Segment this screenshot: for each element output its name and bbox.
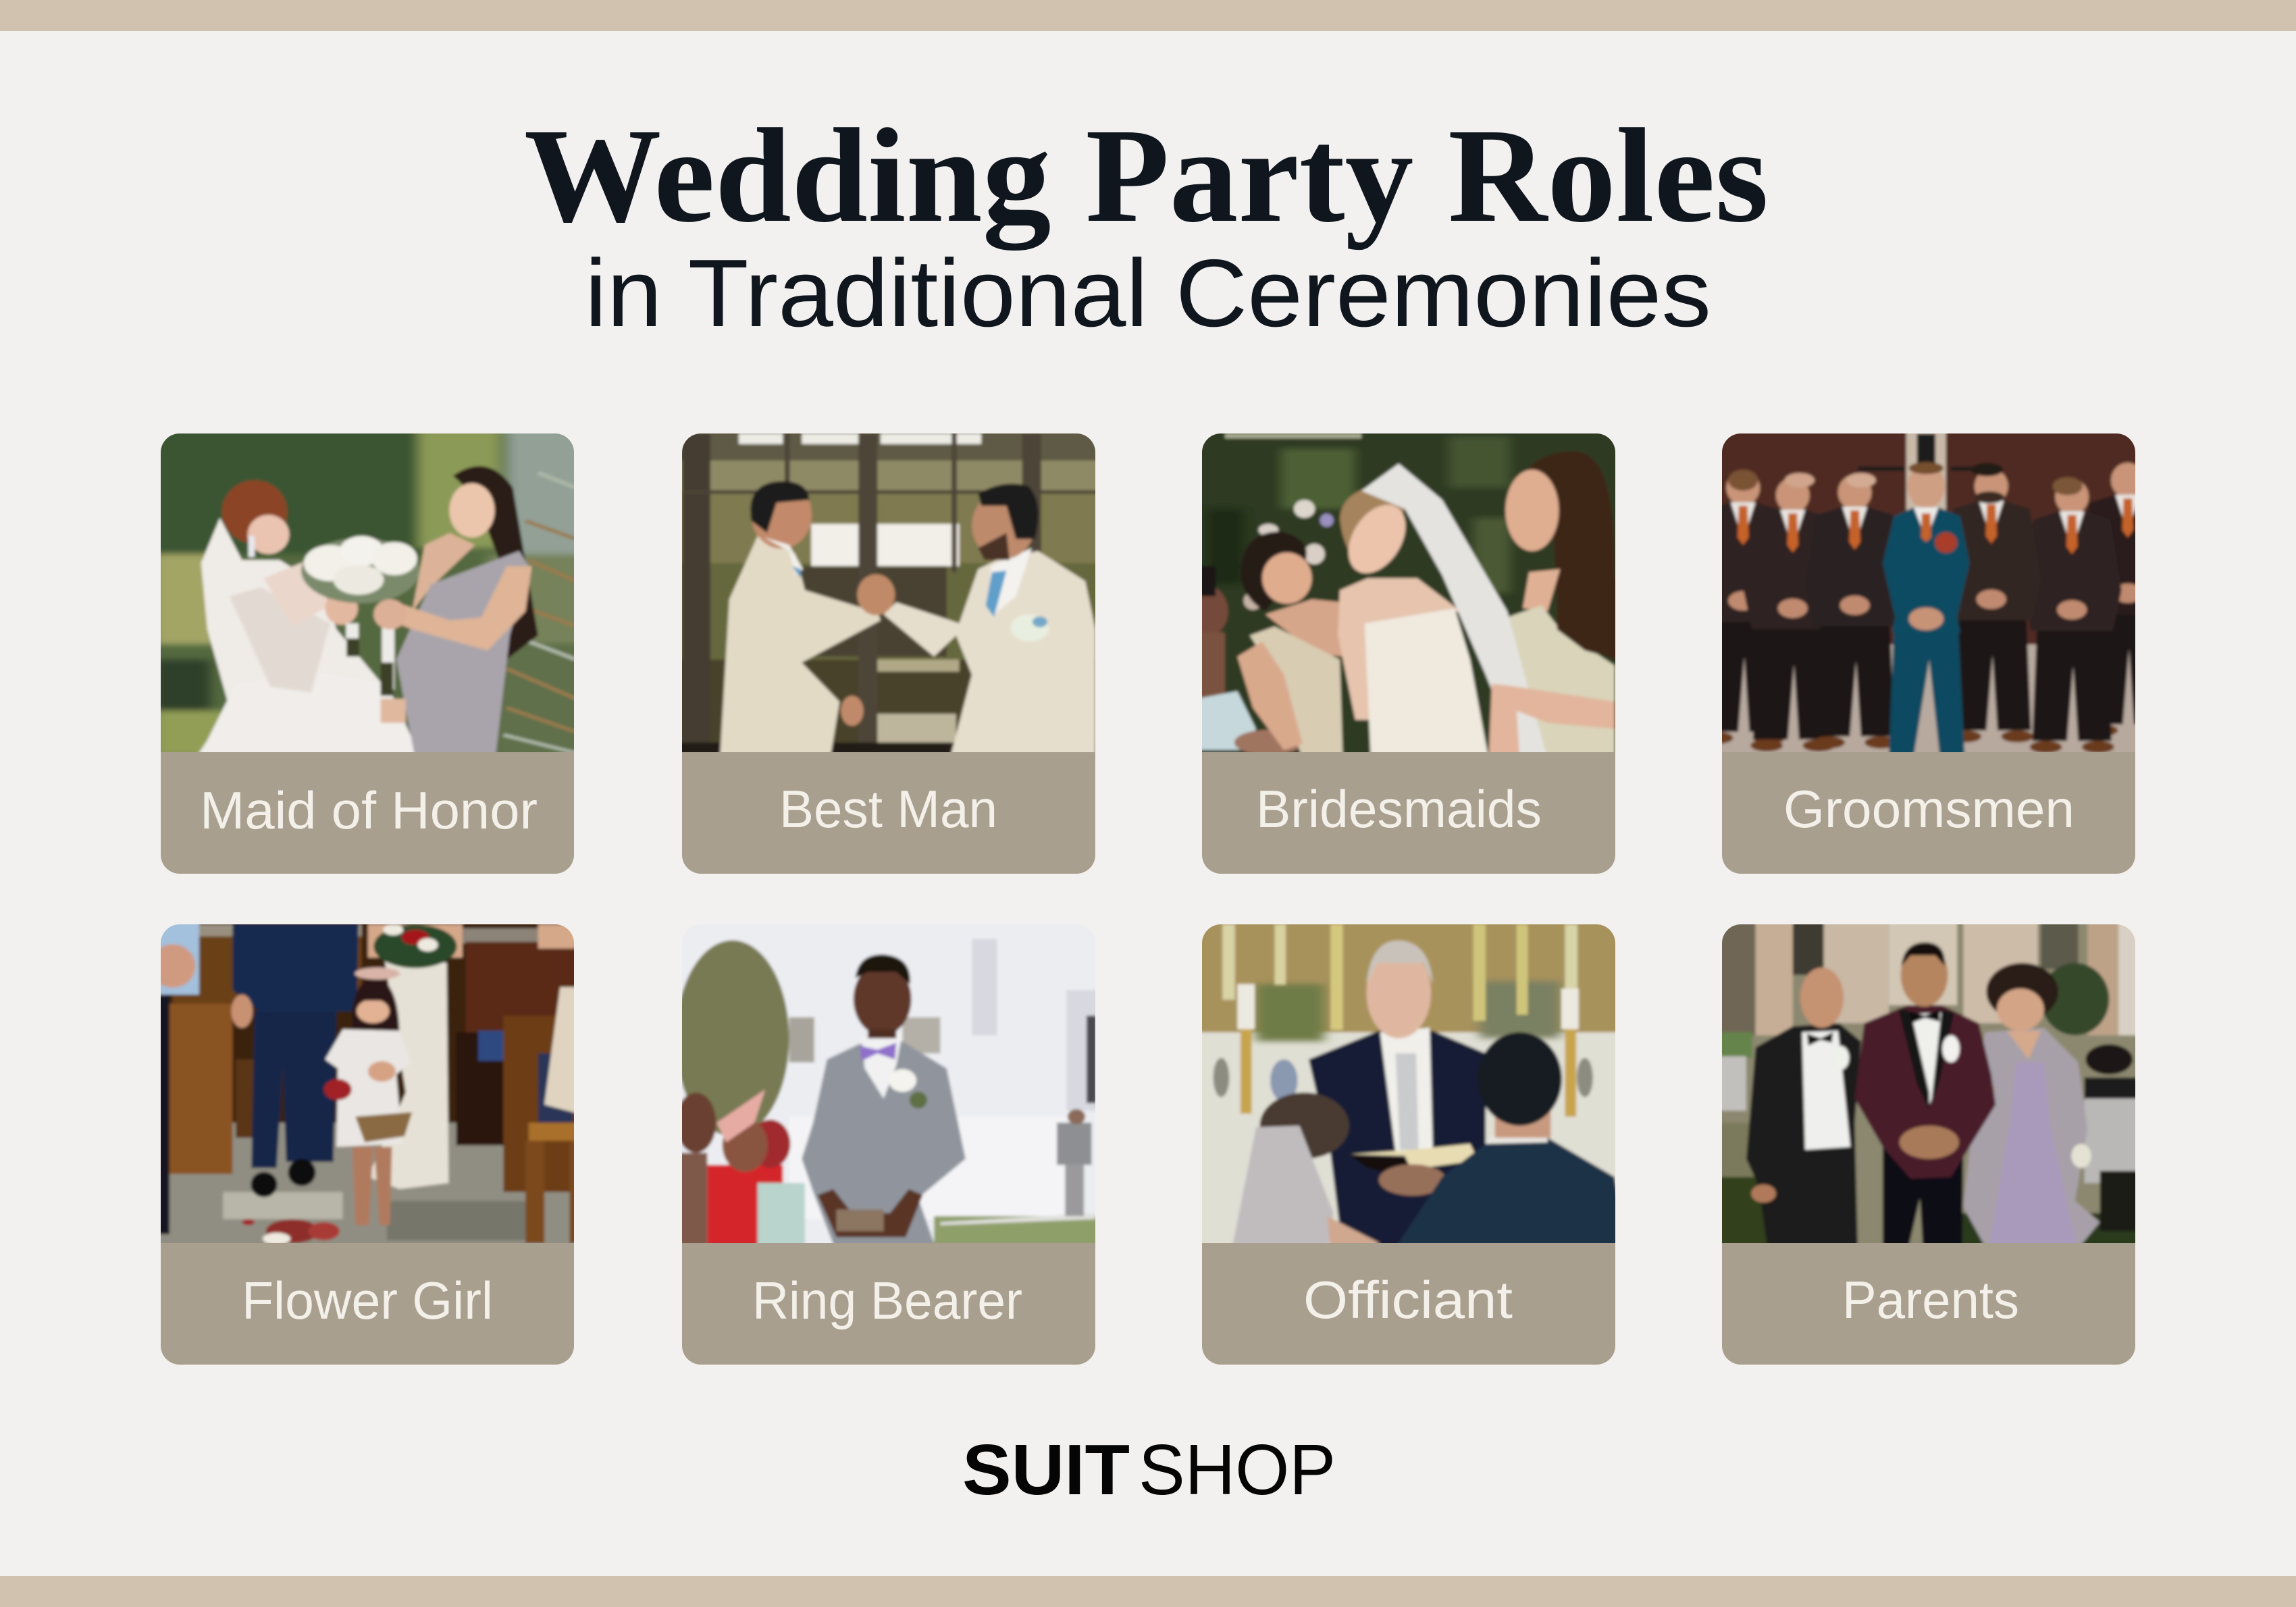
bride from behind (1231, 1092, 1380, 1253)
groom in burgundy jacket (1855, 943, 1995, 1253)
groom in cream suit (857, 483, 1095, 759)
groomsman 5 (1941, 463, 2041, 743)
distant guest (1057, 1109, 1091, 1216)
spruce branches (503, 473, 576, 753)
blurred building, tree and lawn (676, 939, 1104, 1249)
altar with candles (1214, 924, 1593, 1117)
bride (194, 480, 421, 759)
caption: Bridesmaids: Bridesmaids (1256, 779, 1542, 839)
curtains and garden (1703, 915, 2149, 1253)
caption: Best Man: Best Man (779, 779, 997, 839)
panel: Parents (1703, 915, 2156, 1365)
mother in lavender dress and shawl (1963, 963, 2100, 1253)
father in black tuxedo (1746, 968, 1861, 1253)
caption: Flower Girl: Flower Girl (242, 1271, 493, 1330)
photo: ring bearer in gray suit (663, 915, 1117, 1253)
panel: Groomsmen (1694, 425, 2177, 874)
caption: Groomsmen: Groomsmen (1783, 779, 2075, 839)
panel: Flower Girl (141, 915, 595, 1365)
officiant (1309, 941, 1486, 1253)
caption: Officiant: Officiant (1303, 1270, 1513, 1329)
logo: SUITSHOP (962, 1430, 1336, 1510)
ring bearer (802, 955, 966, 1253)
groomsman 7 (2078, 463, 2177, 737)
caption: Best Man (682, 752, 1095, 874)
groom from behind (1392, 1032, 1628, 1253)
caption: Officiant (1202, 1243, 1615, 1365)
scattered petals (242, 1219, 340, 1245)
guest at right in floral dress (538, 924, 579, 1113)
background windows and mullions (682, 433, 1095, 752)
caption: Ring Bearer (682, 1243, 1095, 1365)
door pilaster and ironwork (1858, 425, 1998, 530)
subtitle: in Traditional Ceremonies (585, 240, 1711, 347)
groomsman 3 (1805, 473, 1904, 748)
man in navy suit (231, 924, 359, 1197)
caption: Groomsmen (1722, 752, 2135, 874)
logo: SUITSHOP: SHOP (1139, 1430, 1336, 1510)
boy in background (2085, 1045, 2146, 1231)
groomsman 6 (2023, 477, 2122, 753)
logo: SUITSHOP: SUIT (962, 1430, 1130, 1510)
right bridesmaid (1505, 452, 1628, 759)
panel: Maid of Honor (161, 433, 574, 874)
maid of honor (374, 466, 538, 759)
caption: Ring Bearer: Ring Bearer (752, 1271, 1022, 1330)
caption: Flower Girl (161, 1243, 574, 1365)
photo: best man and groom shaking hands (682, 433, 1095, 752)
left bridesmaid (1237, 531, 1343, 759)
photo: flower girl walking down the aisle (141, 915, 595, 1253)
guest at left (147, 918, 199, 1234)
caption: Parents (1722, 1243, 2135, 1365)
photo: bride and maid of honor (161, 433, 574, 752)
top band (0, 0, 2296, 31)
panel: Officiant (1182, 915, 1634, 1365)
caption: Parents: Parents (1842, 1270, 2019, 1329)
bottom band (0, 1576, 2296, 1607)
photo: officiant holding a book (1182, 915, 1634, 1253)
photo: groom walking with his parents (1703, 915, 2156, 1253)
bouquet (301, 536, 419, 695)
groomsman 1 (1694, 470, 1793, 744)
far-left bridesmaid (1178, 566, 1303, 755)
church pews and floor (169, 924, 582, 1243)
title: Wedding Party Roles (524, 101, 1769, 251)
caption: Maid of Honor (161, 752, 574, 874)
best man in cream suit (720, 481, 881, 759)
foliage and roses (1206, 433, 1511, 610)
caption: Maid of Honor: Maid of Honor (200, 781, 538, 840)
bride (1338, 464, 1615, 759)
flower girl (324, 968, 412, 1226)
groomsman 2 (1743, 473, 1842, 752)
panel: Bridesmaids (1202, 433, 1615, 874)
photo: groom and groomsmen lined up (1694, 425, 2177, 762)
photo: bride laughing with bridesmaids (1202, 433, 1615, 752)
seated guests (676, 1090, 805, 1249)
bride with bouquet (368, 924, 463, 1189)
panel: Ring Bearer (663, 915, 1117, 1365)
groom in teal suit (1883, 462, 1970, 756)
panel: Best Man (682, 433, 1095, 874)
caption: Bridesmaids (1202, 752, 1615, 874)
